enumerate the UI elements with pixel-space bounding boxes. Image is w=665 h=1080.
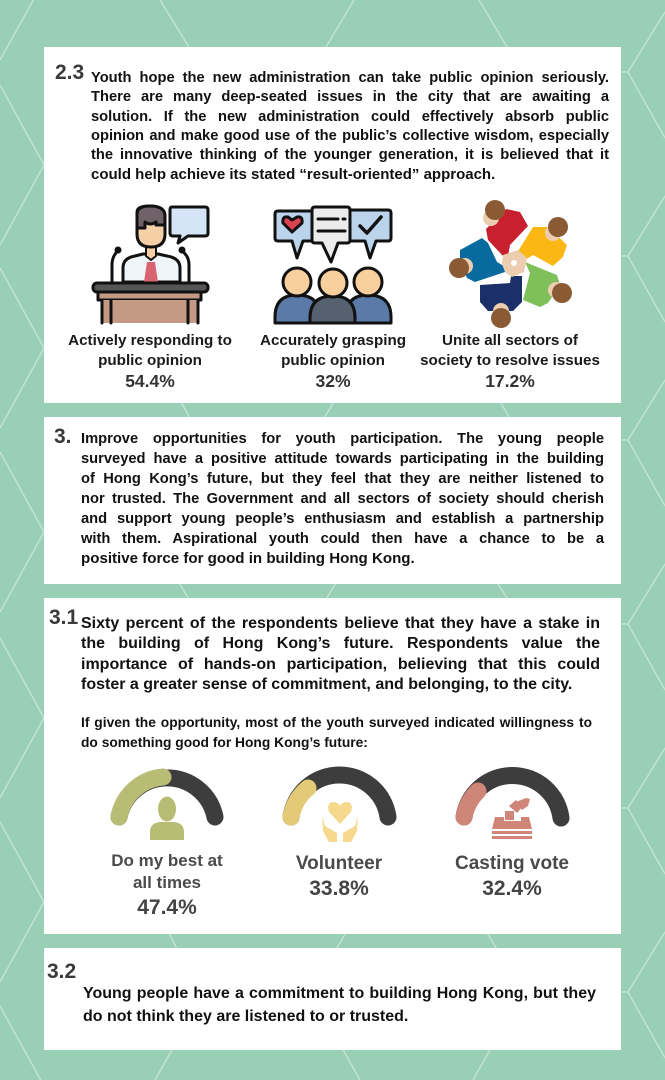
caption: grasping — [260, 332, 406, 391]
text block: sixty percent: Sixty percent of the respondents believe that they have a stake in — [81, 615, 600, 632]
text block: improve opportunities: and support young people’s enthusiasm and establish a partnership — [81, 511, 604, 527]
text block: improve opportunities: surveyed have a positive attitude towards participating in the building — [81, 451, 604, 467]
label: casting vote: 32.4% — [482, 877, 542, 900]
icon: speaker at podium — [92, 204, 210, 324]
caption: grasping: public opinion — [281, 352, 385, 369]
caption: unite: society to resolve issues — [420, 352, 600, 369]
number 3.2: 3.2 — [47, 960, 76, 983]
icon: hands holding heart — [322, 802, 358, 842]
panel: 3.2 commitment — [44, 948, 620, 1050]
gauge: do my best — [110, 768, 224, 840]
panel: 2.3 public opinion — [44, 47, 620, 403]
number 2.3: 2.3 — [55, 61, 84, 84]
icon: ballot box — [492, 798, 532, 839]
label: do my best: all times — [133, 873, 201, 892]
caption: responding: Actively responding to — [68, 332, 232, 349]
caption: unite: Unite all sectors of — [442, 332, 578, 349]
text block: youth hope: opinion and make good use of the public’s collective wisdom, especially — [91, 128, 609, 144]
text block: improve opportunities — [81, 431, 604, 567]
label: volunteer: Volunteer — [296, 853, 382, 874]
label: do my best: 47.4% — [137, 896, 197, 919]
text block: sixty percent: the building of Hong Kong’s future. Respondents value the — [81, 635, 600, 652]
text block: sixty percent: importance of hands-on participation, believing that this could — [81, 656, 600, 673]
text block: youth hope: There are many deep-seated issues in the city that are awaiting a — [91, 89, 609, 105]
caption: responding — [68, 332, 232, 391]
number 3: 3. — [54, 425, 72, 448]
text block: if given the opportunity: If given the opportunity, most of the youth surveyed indicated willingness to — [81, 715, 592, 730]
icon: five people joining hands — [449, 200, 572, 328]
caption: responding: 54.4% — [125, 371, 175, 391]
caption: unite: 17.2% — [485, 371, 535, 391]
panel: 3.1 stake in future — [44, 598, 620, 934]
panel: 3 youth participation — [44, 417, 620, 584]
caption: grasping: 32% — [315, 371, 351, 391]
text block: youth hope: solution. If the new administration could effectively absorb public — [91, 109, 609, 125]
number 3.1: 3.1 — [49, 606, 78, 629]
text block: young people commitment: do not think they are listened to or trusted. — [83, 1008, 408, 1025]
label: casting vote: Casting vote — [455, 853, 569, 874]
caption: grasping: Accurately grasping — [260, 332, 406, 349]
gauge: volunteer — [282, 766, 396, 842]
label: do my best — [111, 851, 223, 919]
caption: unite — [420, 332, 600, 391]
text block: if given the opportunity — [81, 715, 592, 750]
text block: improve opportunities: positive force for good in building Hong Kong. — [81, 550, 415, 567]
icon: person — [150, 796, 184, 840]
text block: youth hope: Youth hope the new administration can take public opinion seriously. — [91, 70, 609, 86]
text block: improve opportunities: with them. Aspirational youth could then have a chance to be a — [81, 531, 604, 547]
label: casting vote — [455, 853, 569, 900]
text block: improve opportunities: of Hong Kong’s future, but they feel that they are neither listened to — [81, 471, 604, 487]
text block: youth hope: the innovative thinking of the younger generation, it is believed that it — [91, 147, 609, 163]
text block: improve opportunities: nor trusted. The Government and all sectors of society should cherish — [81, 491, 604, 507]
caption: responding: public opinion — [98, 352, 202, 369]
gauge: casting vote — [456, 767, 570, 839]
text block: if given the opportunity: do something good for Hong Kong’s future: — [81, 735, 368, 750]
text block: young people commitment — [83, 985, 596, 1025]
label: do my best: Do my best at — [111, 851, 223, 870]
label: volunteer: 33.8% — [309, 877, 369, 900]
text block: sixty percent: foster a greater sense of commitment, and belonging, to the city. — [81, 676, 572, 693]
label: volunteer — [296, 853, 382, 900]
text block: youth hope: could help achieve its stated “result-oriented” approach. — [91, 166, 495, 183]
icon: crowd with speech bubbles — [274, 206, 392, 324]
text block: sixty percent — [81, 615, 600, 693]
text block: improve opportunities: Improve opportunities for youth participation. The young people — [81, 431, 604, 447]
text block: youth hope — [91, 70, 610, 183]
text block: young people commitment: Young people have a commitment to building Hong Kong, but they — [83, 985, 596, 1002]
